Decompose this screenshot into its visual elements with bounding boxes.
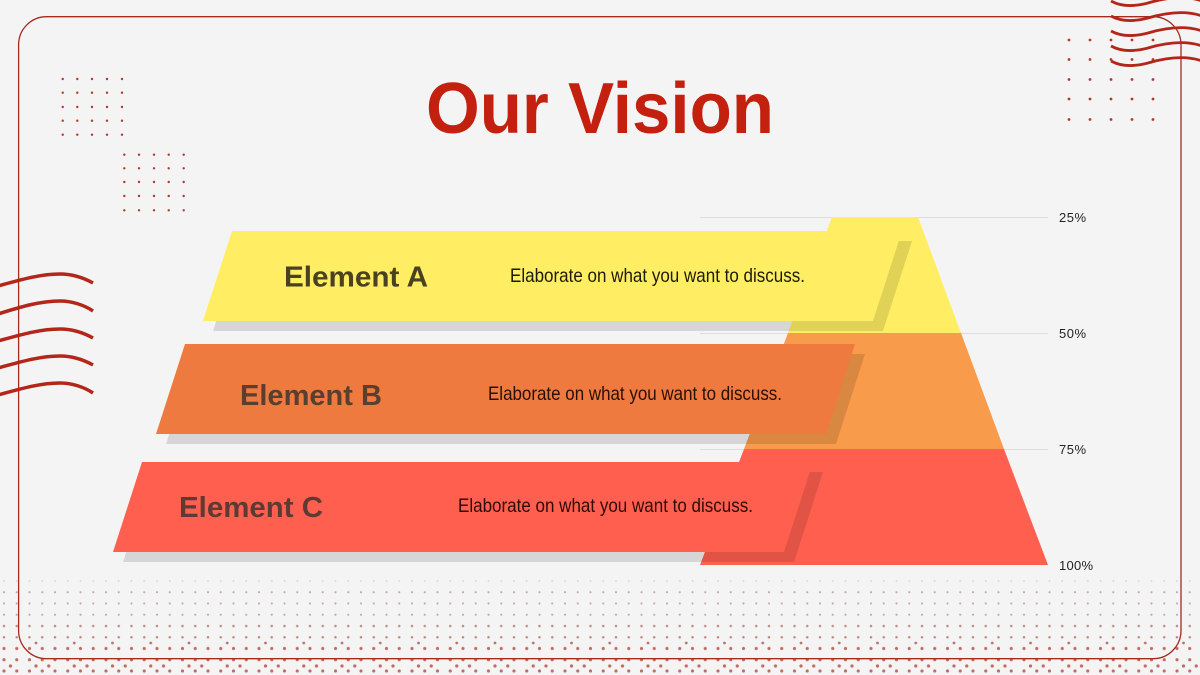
halftone dot field along the bottom [0, 575, 1200, 675]
description C: Elaborate on what you want to discuss. [458, 495, 753, 517]
label: 25%: 25% [1059, 210, 1086, 225]
banner B [156, 344, 855, 434]
pyramid tier: 50 percent [744, 333, 1004, 449]
label: 50%: 50% [1059, 326, 1086, 341]
dot grid: upper left [62, 78, 123, 136]
heading: Element A: Element A [284, 262, 428, 294]
decorative waves: top right [1111, 0, 1200, 65]
banner C [113, 462, 813, 552]
pyramid tier: 25 percent [788, 217, 961, 333]
label: 75%: 75% [1059, 442, 1086, 457]
description B: Elaborate on what you want to discuss. [488, 383, 782, 405]
title: Our Vision [426, 69, 774, 149]
dot grid: upper right [1068, 39, 1154, 121]
banner A [203, 231, 902, 321]
banner shadow A [213, 241, 912, 331]
pyramid tier: 75 to 100 percent [700, 449, 1048, 565]
scale labels [1059, 210, 1093, 573]
pyramid chart [700, 217, 1048, 565]
description A: Elaborate on what you want to discuss. [510, 265, 805, 287]
panel: Element A [203, 231, 912, 331]
panel: Element B [156, 344, 865, 444]
dot grid: lower left [123, 154, 185, 212]
decorative waves: left [0, 274, 93, 395]
panel: Element C [113, 462, 823, 562]
heading: Element B: Element B [240, 380, 382, 412]
banner shadow B [166, 354, 865, 444]
banner shadow C [123, 472, 823, 562]
heading: Element C: Element C [179, 492, 323, 524]
label: 100%: 100% [1059, 558, 1093, 573]
scale grid lines [700, 218, 1048, 450]
